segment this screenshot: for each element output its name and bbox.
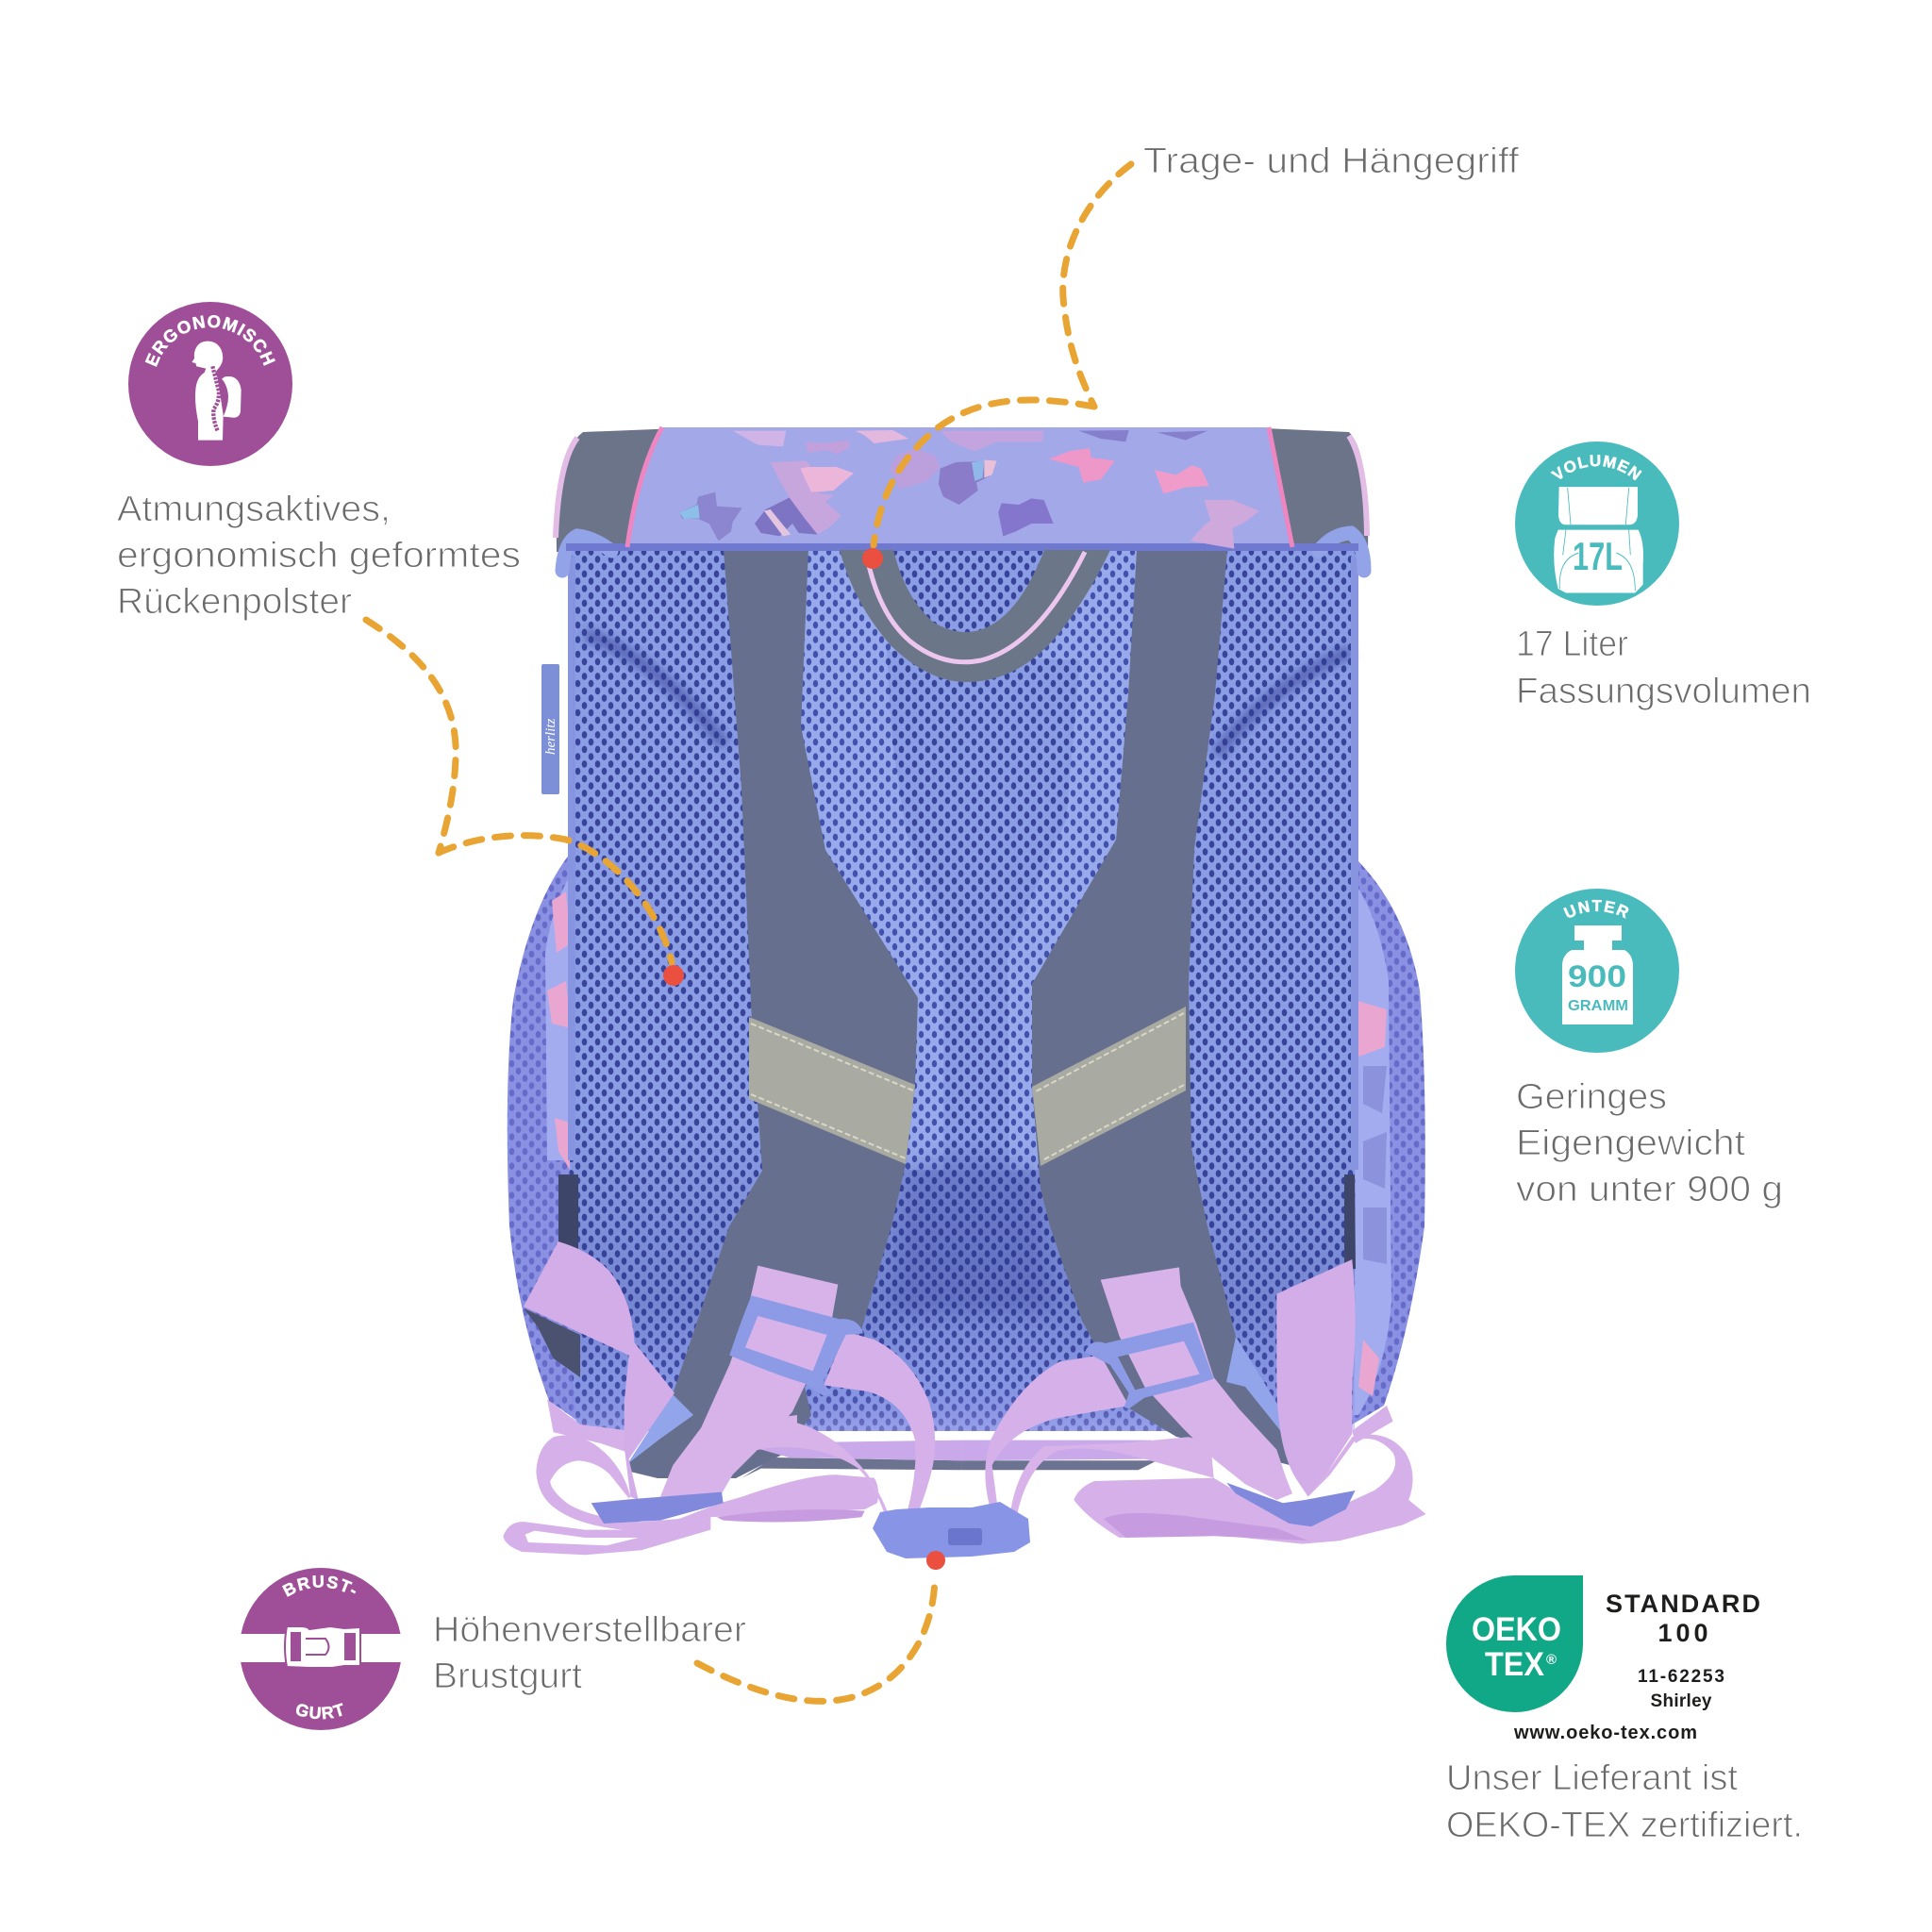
left adjuster buckle: [729, 1295, 863, 1396]
badge: volumen: 17L: [1573, 534, 1623, 578]
side piping: [556, 438, 577, 538]
callout dot: handle: [862, 548, 883, 569]
mesh panel shading: [572, 1113, 1355, 1431]
callout arrow: chest strap: [697, 1577, 935, 1701]
text: weight: [1516, 1077, 1783, 1209]
top gray shell: [557, 428, 1368, 552]
text: OEKO-TEX: [1446, 1758, 1803, 1845]
main mesh panel: [570, 547, 1357, 1431]
right adjuster buckle: [1085, 1323, 1214, 1408]
right strap end: [1226, 1483, 1356, 1526]
panel creases: [585, 634, 1351, 755]
left outer strap: [524, 1241, 675, 1500]
badge: chest strap: GURT: [296, 1703, 343, 1719]
badge: weight: [1515, 889, 1679, 1053]
callout dot: chest strap: [926, 1551, 945, 1570]
backpack photo: [503, 427, 1426, 1558]
icon: weight: [1562, 925, 1633, 1024]
label: handle: Trage- und Hängegriff: [1143, 142, 1519, 181]
logo: OEKO-TEX: [1446, 1575, 1760, 1743]
left pocket band: [547, 1399, 629, 1453]
icon: buckle: [285, 1626, 360, 1668]
text: volume: [1516, 625, 1811, 711]
right side pocket: [1344, 854, 1425, 1429]
left webbing: [660, 1266, 838, 1497]
text: OEKO-TEX: Unser Lieferant ist: [1446, 1758, 1738, 1798]
left pocket fabric: [545, 873, 577, 1160]
right outer strap: [1276, 1259, 1356, 1497]
badge: volumen: [1515, 441, 1679, 606]
right loop: [1074, 1435, 1426, 1544]
top flap: [625, 427, 1294, 549]
text: back pad: ergonomisch geformtes: [117, 536, 521, 575]
upper handle gap mesh: [893, 550, 1044, 641]
text: chest strap: [433, 1610, 746, 1696]
text: weight: Geringes: [1516, 1077, 1667, 1117]
text: OEKO-TEX: OEKO-TEX zertifiziert.: [1446, 1806, 1803, 1845]
binding frame: [572, 557, 1355, 1170]
dark inner gaps: [558, 1174, 578, 1269]
reflective stripe left: [749, 1017, 915, 1164]
flap piping: [627, 427, 1292, 547]
left tail: [503, 1517, 710, 1555]
reflective stitching: [751, 1013, 1184, 1160]
text: chest strap: Brustgurt: [433, 1657, 582, 1696]
left strap to chest buckle: [824, 1332, 935, 1533]
badge: weight: GRAMM: [1568, 998, 1628, 1014]
text: chest strap: Höhenverstellbarer: [433, 1610, 746, 1650]
base seam lilac: [739, 1441, 962, 1460]
chest buckle slot: [948, 1528, 982, 1545]
base seam gray: [962, 1460, 1158, 1470]
icon: spine figure: [192, 341, 242, 441]
reflective stripe right: [1032, 1007, 1186, 1166]
center mesh column light: [801, 550, 1137, 1170]
right second strap: [1009, 1437, 1214, 1522]
chest buckle: [873, 1502, 1030, 1558]
brand tab: herlitz: [543, 719, 558, 755]
logo drop: [1446, 1575, 1583, 1712]
text: back pad: Rückenpolster: [117, 582, 352, 622]
logo: OEKO-TEX: 11-62253: [1638, 1667, 1724, 1687]
badge: chest strap: BRUST-: [282, 1575, 357, 1597]
text: volume: 17 Liter: [1516, 625, 1628, 664]
badge: weight: UNTER: [1563, 900, 1628, 919]
badge: weight: 900: [1568, 959, 1626, 993]
badge: ergonomisch: [128, 302, 292, 466]
right lower straps: [962, 1259, 1426, 1544]
badge: ergonomisch: ERGONOMISCH: [145, 315, 275, 367]
flap lower shadow: [566, 543, 1358, 551]
left lower straps: [503, 1241, 962, 1555]
left loop shade: [717, 1509, 865, 1523]
logo: OEKO-TEX: Shirley: [1651, 1691, 1712, 1711]
badge: volumen: VOLUMEN: [1551, 455, 1642, 481]
brand tab: [541, 664, 559, 794]
right loop shade: [1104, 1513, 1308, 1541]
callout dot: back pad: [663, 965, 684, 986]
text: back pad: Atmungsaktives,: [117, 490, 391, 529]
flap butterflies left: [679, 430, 1054, 541]
icon: backpack: [1554, 487, 1643, 593]
badge: chest strap: [241, 1568, 401, 1730]
callout arrow: back pad: [366, 620, 672, 962]
handle piping: [866, 552, 1085, 662]
left side pocket: [508, 854, 583, 1424]
left strap end: [591, 1492, 724, 1524]
left loop: [536, 1435, 878, 1530]
base seam gray: [742, 1457, 962, 1478]
white band: [240, 1634, 402, 1662]
text: back pad: [117, 490, 521, 622]
text: volume: Fassungsvolumen: [1516, 672, 1811, 711]
right strap to chest buckle: [985, 1356, 1129, 1525]
lumbar shadow: [891, 1155, 1052, 1311]
base seam lilac: [962, 1441, 1151, 1460]
center mesh column: [887, 651, 1080, 1170]
strap mesh edge right: [1226, 1337, 1305, 1467]
logo: OEKO-TEX: TEX: [1485, 1646, 1545, 1683]
left shoulder strap: [629, 550, 918, 1478]
text: weight: von unter 900 g: [1516, 1170, 1783, 1209]
logo: OEKO-TEX: www.oeko-tex.com: [1513, 1723, 1697, 1743]
left dark gap: [524, 1308, 580, 1377]
logo: OEKO-TEX: 100: [1658, 1619, 1707, 1647]
logo: OEKO-TEX: STANDARD: [1606, 1590, 1760, 1618]
text: weight: Eigengewicht: [1516, 1124, 1745, 1163]
logo: OEKO-TEX: OEKO: [1472, 1611, 1561, 1648]
pocket butterflies: [547, 891, 1387, 1396]
right webbing: [1101, 1267, 1292, 1500]
left second strap: [739, 1415, 894, 1533]
logo: OEKO-TEX: ®: [1546, 1652, 1557, 1668]
flap butterflies right: [1049, 430, 1259, 549]
right pocket band: [1352, 1406, 1393, 1443]
right shoulder strap: [1032, 550, 1305, 1469]
right pocket fabric: [1351, 877, 1391, 1415]
carry handle: [840, 550, 1110, 682]
corner binding: [562, 536, 611, 571]
strap mesh edge left: [627, 1394, 693, 1464]
callout arrow: handle: [874, 164, 1131, 545]
